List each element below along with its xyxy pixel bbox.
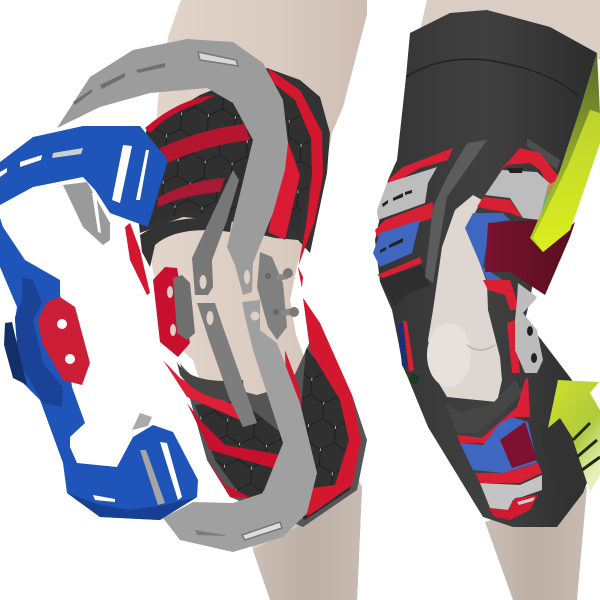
gray frame upper: [57, 39, 288, 295]
red side flap: [125, 223, 150, 295]
left plates: [373, 140, 487, 307]
down arrow green: [530, 53, 600, 252]
kneecap: [427, 323, 471, 387]
red trim: right rim: [268, 68, 323, 288]
right plates: [465, 138, 562, 310]
red hub plate: [38, 297, 90, 385]
gray hinge plate right: [257, 252, 299, 340]
red pad with gray plate: [153, 267, 195, 357]
lower cutout plates: [445, 377, 542, 520]
red trim: top edge: [145, 95, 215, 133]
slots top: [198, 52, 238, 66]
slots upper strap: [20, 155, 42, 167]
gray frame rear tab: [63, 182, 110, 245]
window upper strap: [112, 145, 132, 203]
gray spine: [425, 140, 487, 283]
red bands: [160, 124, 250, 165]
knee skin: [427, 195, 502, 402]
left leg: [148, 0, 367, 600]
lower liner with hex padding: [163, 298, 367, 527]
window lower strap: [160, 442, 182, 500]
maroon strap with notch: [485, 220, 575, 295]
arrow shadow: [540, 420, 585, 495]
lower dark edge: [140, 218, 232, 267]
gray frame lower: [163, 270, 317, 552]
lower hinge plate: [507, 300, 543, 373]
lower left strip: [398, 320, 419, 384]
red outer trim: [296, 298, 361, 517]
upper liner with hex padding: [125, 68, 330, 295]
right leg: [420, 0, 600, 600]
black sleeve: [375, 10, 597, 527]
up arrow green: [548, 380, 600, 492]
blue frame: [0, 126, 198, 520]
gray hinge arm: [192, 170, 257, 427]
red bands: [163, 360, 242, 420]
hub dark plate: [15, 277, 63, 407]
dark arc: [177, 362, 245, 402]
